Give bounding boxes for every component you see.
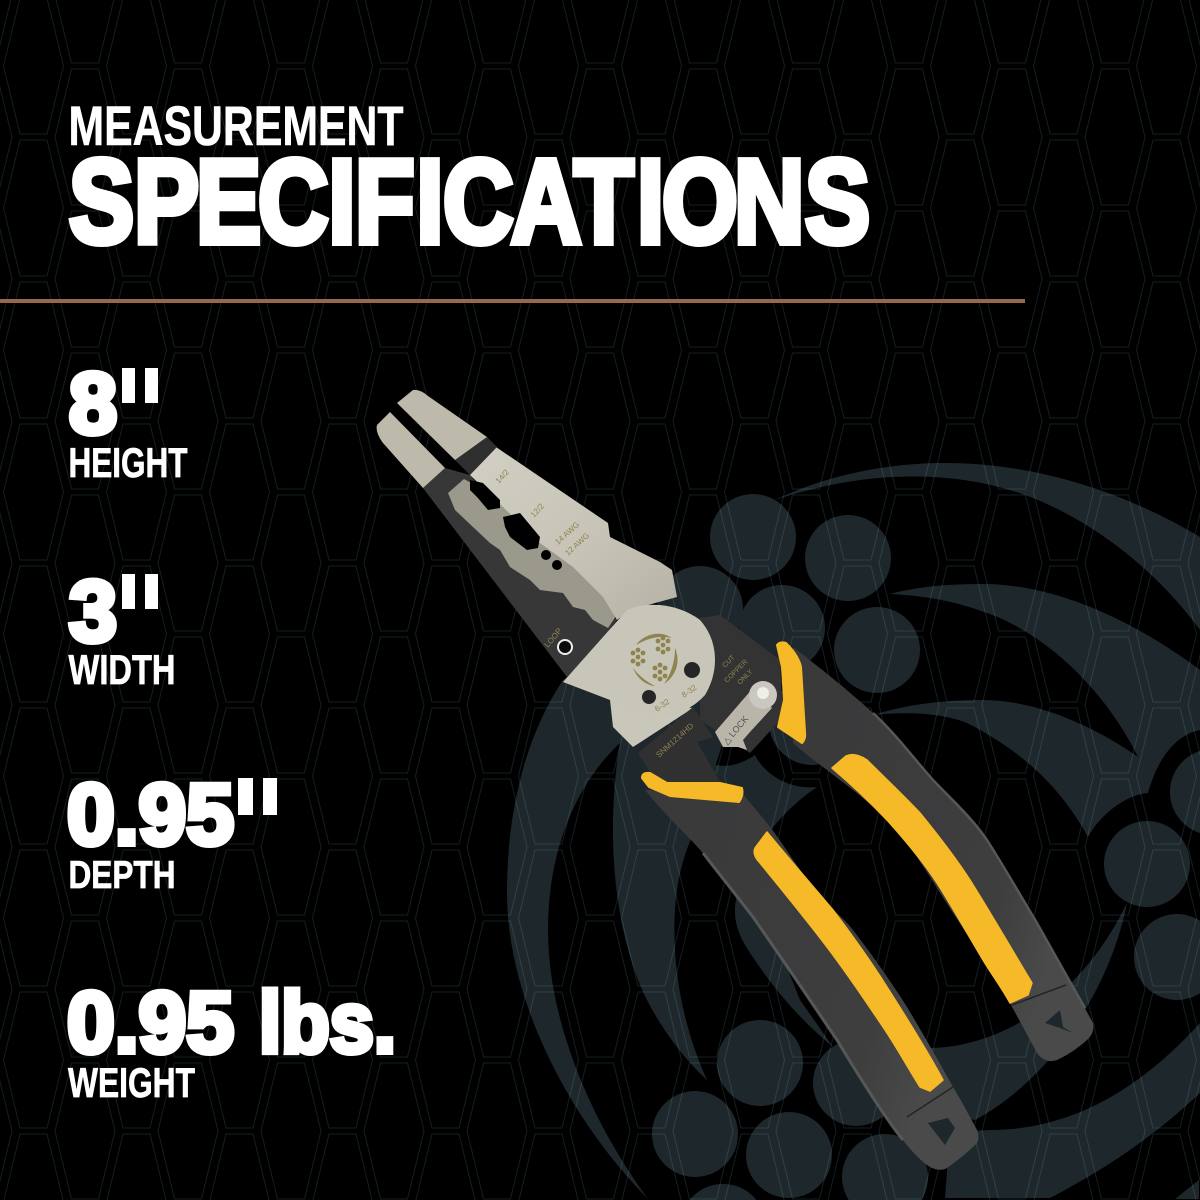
value 0.95 lbs: 0.95 [67,975,234,1071]
value 8 inches: 8 [69,356,117,452]
dark lower jaw [423,468,617,677]
black band between tines and jaw [455,437,497,475]
engraved labels: 6-32 [653,697,672,714]
pliers [377,390,1093,1170]
engraved labels [494,467,755,759]
engraved labels: 12/2 [529,501,546,519]
label height: HEIGHT [68,439,188,486]
heading [68,94,870,269]
spec: width [68,564,176,693]
spec: weight [67,975,396,1106]
engraved labels: 12 AWG [563,531,591,557]
divider [0,299,1025,303]
right tine [397,390,487,460]
dark lower body [638,707,720,782]
heading line 1: MEASUREMENT [68,94,404,157]
lock lever: △ LOCK [721,714,750,746]
engraved labels: COPPER [723,659,749,684]
holes [557,639,700,704]
stripper teeth [448,479,620,628]
lock lever [715,681,777,750]
wire gauge holes [470,480,562,570]
value 3 inches: 3 [69,564,117,660]
engraved labels: CUT [721,654,737,669]
right yellow cap [777,642,805,743]
value 0.95 inches: 0.95 [67,767,234,863]
spec: height [68,356,188,486]
engraved labels: 8-32 [680,683,699,700]
left yellow cap [642,773,743,802]
right handle [793,647,1093,1061]
left tine [377,412,445,488]
right grip stripe [832,755,1032,1003]
heading line 2: SPECIFICATIONS [69,135,870,269]
engraved labels: 14/2 [494,467,511,485]
left grip stripe [754,832,943,1091]
left lanyard hole [928,1118,955,1145]
label weight: WEIGHT [68,1059,195,1106]
left handle [645,790,978,1170]
pivot plate [563,605,715,718]
lower steel wedge [610,700,693,747]
value 0.95 lbs: lbs. [259,975,396,1071]
label depth: DEPTH [68,854,176,897]
background logo watermark [507,463,1200,1200]
engraved logo [631,634,678,686]
engraved labels: 14 AWG [553,520,581,546]
value 0.95 lbs [67,975,396,1071]
right lanyard hole [1045,1010,1073,1033]
rear dark jaw with cutter [700,615,783,753]
engraved labels: LOOP [543,626,564,649]
label width: WIDTH [68,646,176,693]
upper steel jaw [470,437,677,620]
spec: depth [67,767,277,897]
engraved labels: SNM1214HD [654,721,696,759]
engraved labels: ONLY [736,668,755,686]
